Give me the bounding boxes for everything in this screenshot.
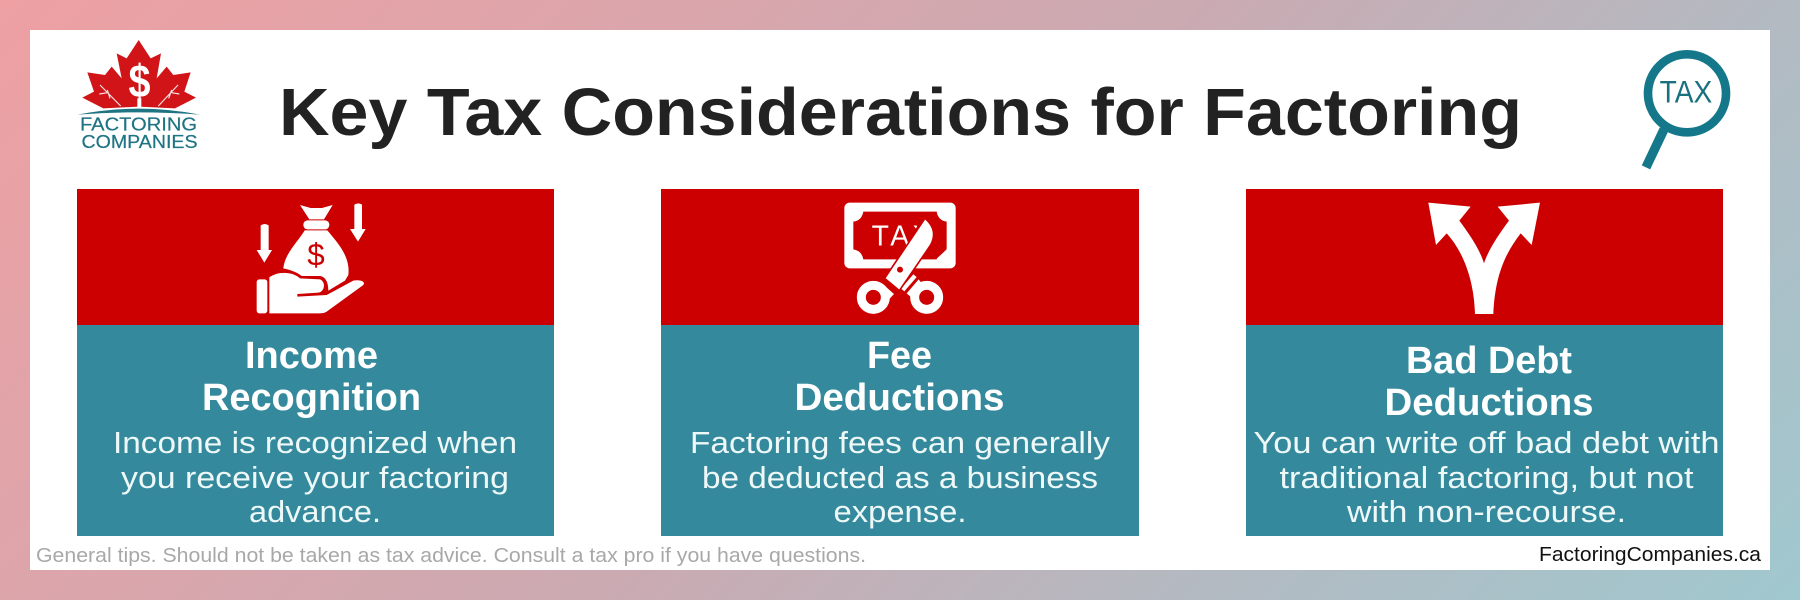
footnote disclaimer: General tips. Should not be taken as tax advice. Consult a tax pro if you have questions. xyxy=(36,544,866,567)
body text: expense. xyxy=(834,494,966,529)
heading: Deductions xyxy=(794,377,1004,419)
teal body band xyxy=(77,325,554,536)
red header band xyxy=(661,189,1139,325)
logo: Factoring Companies maple leaf xyxy=(77,40,200,152)
icon: TAX magnifying glass: TAX xyxy=(1660,74,1712,110)
body text: Factoring fees can generally xyxy=(690,425,1111,460)
panel: income recognition xyxy=(77,189,554,536)
heading: Deductions xyxy=(1384,382,1594,424)
icon: TAX magnifying glass xyxy=(1646,54,1726,167)
heading: Income xyxy=(245,335,378,377)
icon: money bag over hand xyxy=(257,203,366,313)
red header band xyxy=(1246,189,1723,325)
logo: Factoring Companies maple leaf: $ xyxy=(128,55,150,107)
heading: Fee xyxy=(867,335,932,377)
logo: Factoring Companies maple leaf: FACTORING xyxy=(80,115,197,135)
logo: Factoring Companies maple leaf: COMPANIES xyxy=(82,132,198,152)
body text: advance. xyxy=(249,494,381,529)
icon: scissors cutting tax bill xyxy=(844,203,956,309)
body text xyxy=(1254,425,1720,529)
website credit: FactoringCompanies.ca xyxy=(1539,543,1762,566)
heading xyxy=(202,335,421,419)
body text: you receive your factoring xyxy=(121,460,509,495)
body text: You can write off bad debt with xyxy=(1254,425,1720,460)
body text: Income is recognized when xyxy=(113,425,517,460)
body text xyxy=(690,425,1111,529)
icon: money bag over hand: $ xyxy=(307,237,325,272)
heading xyxy=(1384,340,1594,424)
red header band xyxy=(77,189,554,325)
teal body band xyxy=(661,325,1139,536)
title: Key Tax Considerations for Factoring xyxy=(279,75,1522,150)
body text: traditional factoring, but not xyxy=(1280,460,1694,495)
heading xyxy=(794,335,1004,419)
body text: with non-recourse. xyxy=(1346,494,1626,529)
icon: forked arrow xyxy=(1428,203,1540,314)
heading: Recognition xyxy=(202,377,421,419)
body text: be deducted as a business xyxy=(702,460,1098,495)
teal body band xyxy=(1246,325,1723,536)
panel: bad debt deductions xyxy=(1246,189,1723,536)
body text xyxy=(113,425,517,529)
heading: Bad Debt xyxy=(1406,340,1572,382)
panel: fee deductions xyxy=(661,189,1139,536)
icon: scissors cutting tax bill: TAX xyxy=(872,221,935,253)
